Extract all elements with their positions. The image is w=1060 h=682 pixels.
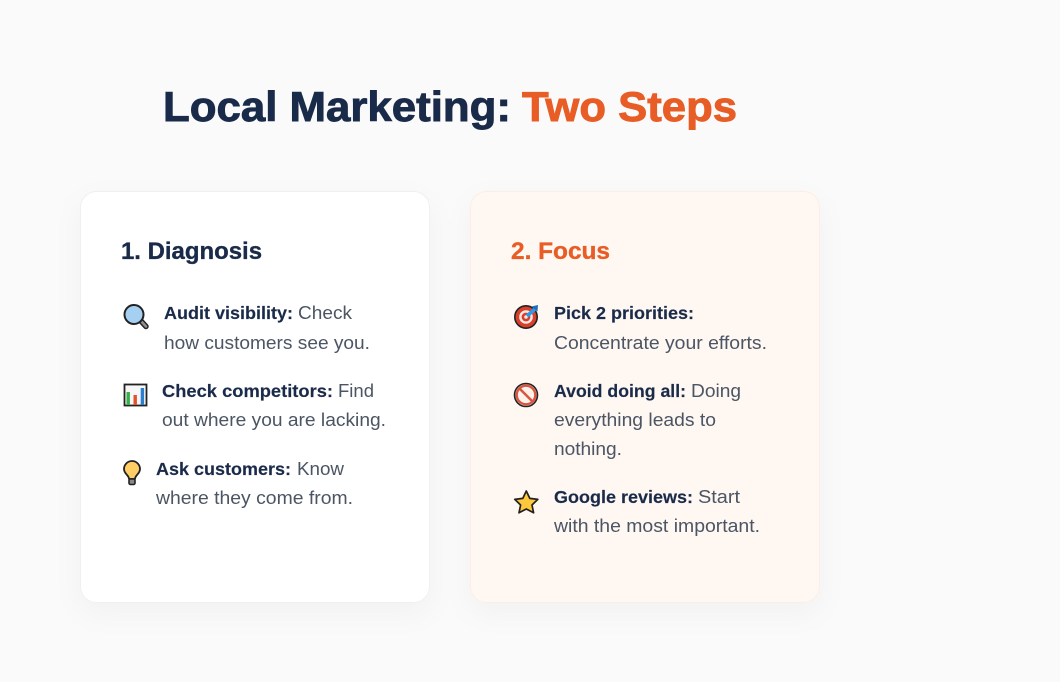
- item: audit visibility: Check: [298, 303, 353, 323]
- item: avoid doing all: [514, 381, 741, 459]
- panel: diagnosis: [80, 192, 430, 602]
- item: avoid doing all: everything leads to: [554, 410, 716, 430]
- item: avoid doing all: nothing.: [554, 439, 622, 459]
- item: google reviews: Start: [698, 487, 740, 507]
- item: ask customers: Know: [297, 459, 345, 479]
- icon: magnifying glass: [124, 305, 146, 326]
- item: pick 2 priorities: [515, 303, 767, 353]
- item: ask customers: [124, 459, 353, 508]
- item: check competitors: [124, 381, 386, 430]
- item: google reviews: Google reviews:: [554, 487, 693, 507]
- panel: focus: [470, 192, 820, 602]
- icon: target with dart: [515, 305, 538, 328]
- heading: 1. Diagnosis: 1. Diagnosis: [121, 238, 262, 265]
- title: Local Marketing:: [163, 83, 511, 130]
- heading: 2. Focus: 2. Focus: [511, 238, 610, 265]
- item: google reviews: [515, 487, 760, 536]
- icon: light bulb: [124, 461, 140, 484]
- icon: prohibited sign: [514, 384, 538, 406]
- item: audit visibility: [124, 303, 370, 353]
- item: ask customers: where they come from.: [155, 488, 353, 508]
- item: check competitors: Find: [338, 381, 374, 401]
- item: check competitors: out where you are lacking.: [162, 410, 386, 430]
- title: [163, 83, 737, 130]
- item: ask customers: Ask customers:: [156, 459, 291, 479]
- item: pick 2 priorities: Concentrate your efforts.: [554, 333, 767, 353]
- icon: bar chart: [124, 384, 146, 406]
- item: audit visibility: how customers see you.: [164, 333, 370, 353]
- item: pick 2 priorities: Pick 2 priorities:: [554, 303, 694, 323]
- icon: star: [515, 491, 538, 513]
- item: avoid doing all: Doing: [691, 381, 741, 401]
- item: check competitors: Check competitors:: [162, 381, 333, 401]
- item: avoid doing all: Avoid doing all:: [554, 381, 686, 401]
- item: google reviews: with the most important.: [553, 516, 760, 536]
- item: audit visibility: Audit visibility:: [164, 303, 293, 323]
- title: Two Steps: [522, 83, 737, 130]
